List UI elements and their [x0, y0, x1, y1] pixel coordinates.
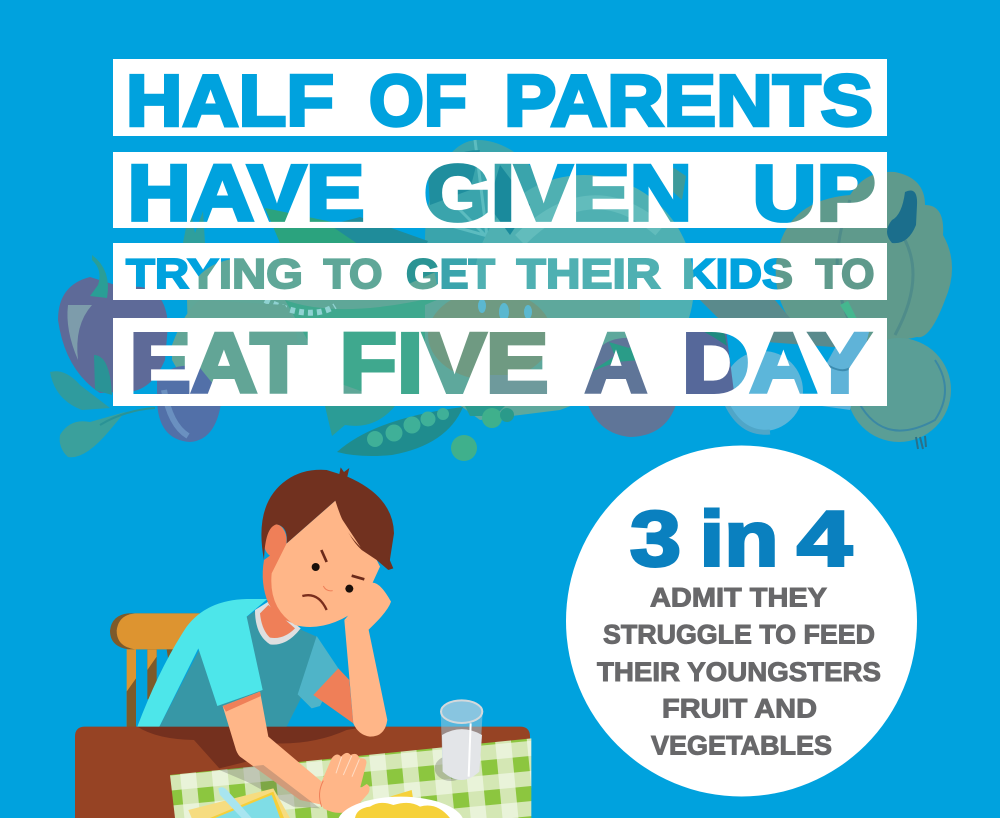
table: [75, 727, 530, 818]
headline banner: TRYING TO GET THEIR KIDS TO: THEIR: [516, 250, 660, 297]
headline banner: HAVE GIVEN UP: [113, 148, 887, 237]
headline banner: HALF OF PARENTS: HALF: [126, 62, 334, 142]
headline banner: TRYING TO GET THEIR KIDS TO: TO: [324, 250, 382, 297]
table shadow: [137, 727, 367, 768]
ear: [263, 524, 287, 557]
headline banner: EAT FIVE A DAY: EAT: [130, 316, 306, 410]
vegetables illustration behind the headline: [50, 140, 952, 461]
headline banner: EAT FIVE A DAY: [113, 316, 887, 410]
statistic description: THEIR YOUNGSTERS: [597, 657, 881, 687]
hand: [320, 753, 370, 813]
headline banner: HAVE GIVEN UP: UP: [752, 148, 876, 237]
statistic description: ADMIT THEY: [650, 582, 827, 612]
vegetable: tomato: [583, 338, 680, 437]
chair: [110, 613, 203, 728]
neck shadow side: [263, 543, 293, 623]
vegetable: onion: [847, 338, 951, 449]
far forearm: [344, 620, 387, 737]
headline banner: HAVE GIVEN UP: HAVE: [128, 148, 364, 237]
glass of milk: [435, 700, 483, 781]
shirt far sleeve: [298, 636, 339, 708]
statistic description: [597, 582, 881, 760]
hair: [261, 467, 394, 570]
headline banner: TRYING TO GET THEIR KIDS TO: TRYING: [126, 250, 303, 297]
statistic: 3 in 4: in: [700, 494, 778, 582]
headline banner: HALF OF PARENTS: PARENTS: [504, 62, 873, 142]
near arm: [223, 692, 323, 805]
headline banner: TRYING TO GET THEIR KIDS TO: GET: [406, 250, 495, 297]
neck and collar: [255, 602, 301, 645]
callout circle: 3 in 4 statistic: [566, 446, 917, 796]
vegetable: courgette and pod: [187, 250, 460, 405]
statistic: 3 in 4: [630, 494, 852, 582]
shirt body: [159, 610, 317, 727]
head: [261, 467, 394, 627]
eyebrows: [321, 550, 364, 579]
headline banner: TRYING TO GET THEIR KIDS TO: [113, 243, 887, 300]
face: [271, 501, 380, 627]
tablecloth: [170, 738, 531, 818]
vegetable: pumpkin: [700, 172, 952, 350]
illustration: boy refusing food at table: [75, 467, 531, 818]
statistic description: FRUIT AND: [662, 694, 817, 724]
eyes: [312, 563, 320, 571]
vegetable: broccoli: [172, 300, 298, 400]
headline banner: HALF OF PARENTS: [113, 59, 887, 142]
statistic description: STRUGGLE TO FEED: [603, 620, 875, 650]
napkin and cutlery: [188, 787, 290, 818]
shirt near sleeve: [137, 599, 267, 727]
arm shadow on cloth: [219, 765, 320, 808]
vegetable: leek: [815, 301, 870, 410]
statistic: 3 in 4: 4: [797, 494, 852, 582]
statistic description: VEGETABLES: [651, 730, 832, 760]
vegetable: pea pod and peas: [325, 406, 514, 461]
vegetable: blue apple: [723, 351, 803, 432]
headline banner: EAT FIVE A DAY: DAY: [682, 316, 871, 410]
vegetable: stalk greens: [183, 207, 428, 261]
mouth: [302, 595, 327, 610]
vegetable: cabbage: [474, 165, 694, 395]
headline banner: HALF OF PARENTS: OF: [369, 62, 467, 142]
headline banner: TRYING TO GET THEIR KIDS TO: KIDS: [682, 250, 793, 297]
vegetable: plum: [157, 366, 222, 442]
headline banner: TRYING TO GET THEIR KIDS TO: TO: [816, 250, 874, 297]
vegetable: rocket leaves: [50, 355, 155, 457]
headline banner: EAT FIVE A DAY: FIVE: [340, 316, 548, 410]
vegetable: squash with drops: [425, 289, 640, 420]
fist on cheek: [344, 583, 391, 630]
vegetable: spinach leaves: [425, 140, 560, 300]
plate with food: [337, 790, 464, 818]
nose: [323, 586, 333, 591]
vegetable: pepper: [58, 255, 168, 393]
vegetable: aubergine: [684, 320, 735, 400]
far arm upper: [313, 668, 353, 723]
headline banner: EAT FIVE A DAY: A: [585, 316, 647, 410]
statistic: 3 in 4: 3: [630, 494, 681, 582]
headline banner: HAVE GIVEN UP: GIVEN: [424, 148, 692, 237]
